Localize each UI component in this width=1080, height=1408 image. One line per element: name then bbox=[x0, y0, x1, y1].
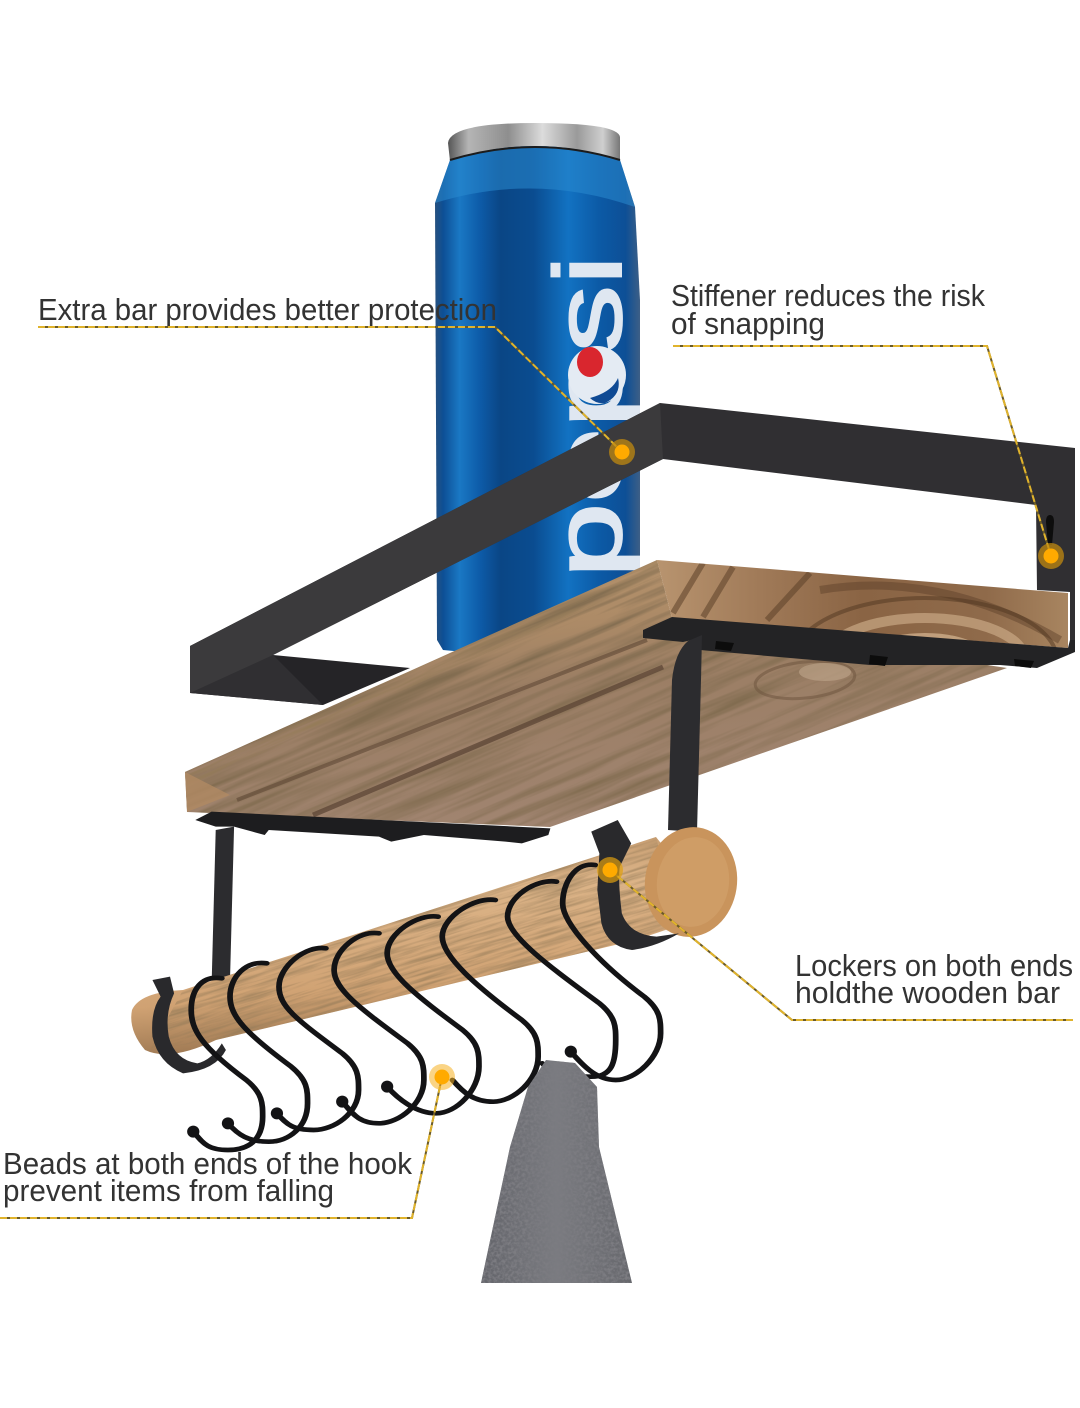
wooden shelf underside bbox=[185, 560, 1007, 827]
icon: keyhole slot bbox=[1046, 515, 1054, 545]
bracket strut bbox=[668, 635, 702, 832]
callout: extra bar bbox=[38, 292, 635, 465]
callout: extra bar: Extra bar provides better protection bbox=[38, 292, 497, 327]
callout: lockers: holdthe wooden bar bbox=[795, 975, 1060, 1010]
icon: blue drink can bbox=[435, 123, 642, 653]
hook 6 bbox=[442, 900, 538, 1102]
left bracket strut bbox=[212, 827, 234, 983]
left locker bbox=[152, 977, 226, 1073]
hook 2 bbox=[228, 963, 308, 1142]
can logo text: pepsi bbox=[535, 255, 642, 578]
back rail of metal frame bbox=[190, 655, 410, 705]
callout: beads: Beads at both ends of the hook bbox=[3, 1146, 412, 1181]
hook beads bbox=[187, 1046, 577, 1138]
can body bbox=[435, 146, 640, 653]
callout: beads: prevent items from falling bbox=[3, 1173, 334, 1208]
dowel end disc bbox=[638, 821, 744, 943]
callout: lockers bbox=[597, 857, 1073, 1020]
right locker bbox=[591, 820, 679, 950]
hook 7 bbox=[508, 881, 616, 1077]
locker straps bbox=[152, 820, 679, 1073]
hook 3 bbox=[277, 948, 359, 1130]
hook 8 bbox=[563, 865, 661, 1080]
can logo text bbox=[550, 262, 640, 571]
callout: beads bbox=[0, 1064, 455, 1218]
hook 4 bbox=[334, 933, 424, 1123]
left bracket bbox=[195, 812, 550, 983]
can lid bbox=[448, 123, 620, 161]
shelf end grain face bbox=[657, 560, 1068, 648]
metal frame rail bbox=[190, 403, 1075, 705]
callout: stiffener: of snapping bbox=[671, 306, 825, 341]
hook 1 bbox=[191, 978, 263, 1150]
callout: stiffener: Stiffener reduces the risk bbox=[671, 278, 985, 313]
S hooks bbox=[187, 865, 661, 1150]
grey towel bbox=[480, 1058, 635, 1284]
callout: stiffener bbox=[671, 278, 1064, 569]
right mounting bracket bbox=[643, 617, 1075, 832]
wooden bar bbox=[131, 827, 738, 1054]
hook 5 bbox=[387, 916, 479, 1113]
